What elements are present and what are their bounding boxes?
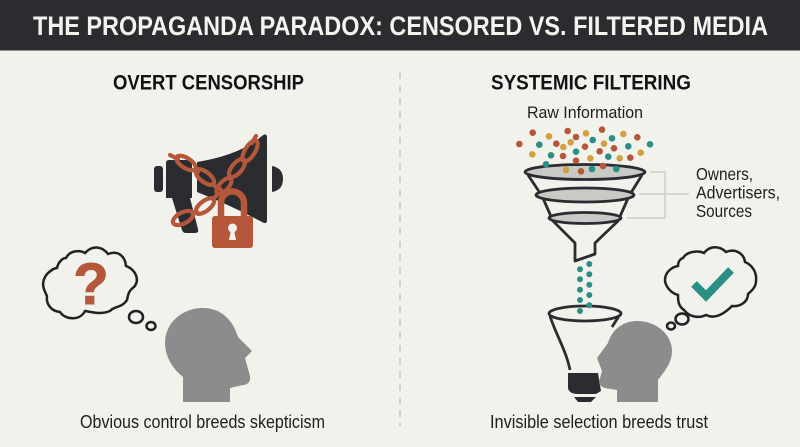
label: filters: Owners, (696, 164, 753, 184)
label: raw information: Raw Information (527, 104, 643, 122)
icon: question mark: ? (73, 252, 109, 317)
icon: filter funnel (525, 164, 645, 261)
panel: systemic filtering (490, 72, 785, 432)
icon: check mark (694, 270, 731, 296)
caption: systemic filtering: Invisible selection breeds trust (490, 412, 708, 432)
title banner (0, 0, 800, 50)
label: filters: Advertisers, (696, 182, 780, 202)
caption: overt censorship: Obvious control breeds skepticism (80, 412, 325, 432)
heading: overt censorship: OVERT CENSORSHIP (113, 72, 304, 94)
icon: chained megaphone (154, 134, 283, 248)
panel: overt censorship (43, 72, 325, 432)
raw information dots (516, 126, 653, 175)
label: filters: Sources (696, 201, 752, 221)
bracket lines (627, 172, 689, 218)
filtered dots stream (577, 261, 592, 314)
icon: skeptical head (165, 308, 252, 402)
icon: padlock (212, 192, 253, 248)
icon: trusting head (597, 321, 672, 402)
thought bubble: check (665, 247, 756, 330)
thought bubble: question (43, 247, 156, 330)
heading: systemic filtering: SYSTEMIC FILTERING (491, 72, 691, 94)
icon: receiving lightbulb funnel (549, 306, 621, 402)
